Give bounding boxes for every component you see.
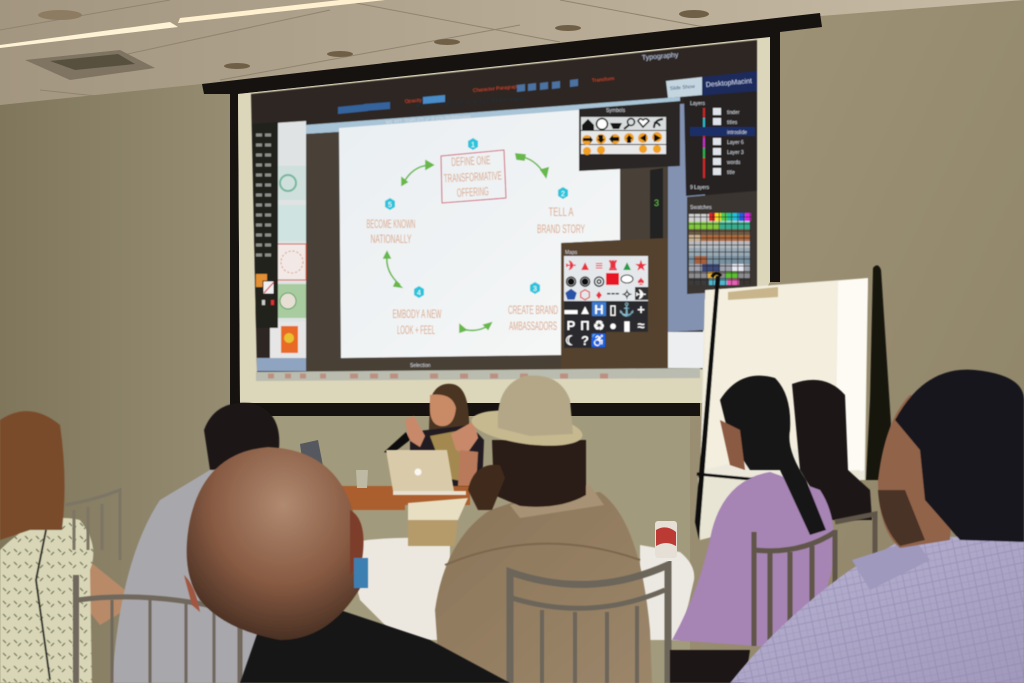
cycle arrows	[384, 154, 548, 332]
application menu labels: DesktopMacint	[706, 78, 752, 89]
maps symbols panel: ⬡	[579, 287, 591, 302]
maps symbols panel: ▬	[564, 302, 578, 317]
front table with orange top	[340, 486, 470, 510]
step 4 label	[392, 286, 442, 337]
man on right in plaid shirt	[730, 370, 1024, 683]
layers panel: words	[727, 160, 741, 166]
left back chair	[65, 490, 120, 560]
application menu labels	[338, 52, 752, 126]
maps symbols panel: ≡	[595, 258, 603, 273]
swatches panel	[687, 191, 757, 294]
layers panel: titles	[727, 120, 738, 126]
maps symbols panel: ◉	[579, 273, 591, 288]
step 1 label	[441, 138, 506, 203]
step 5 label	[366, 198, 416, 246]
application menu labels: WS_PPT_TEMPLATE.ai* @ 91% (RGB/Preview)	[415, 96, 525, 110]
step 2 label: TELL A	[548, 205, 574, 219]
layers panel: Layers	[690, 101, 706, 107]
step 4 label: 4	[417, 290, 421, 297]
step 2 label	[537, 187, 585, 236]
maps symbols panel: ▲	[621, 258, 633, 273]
maps symbols panel	[561, 238, 668, 370]
swatches panel: Swatches	[690, 205, 712, 211]
maps symbols panel: Π	[580, 318, 590, 333]
left front chair	[76, 575, 240, 683]
thermos	[300, 440, 323, 466]
slide thumbnails	[257, 121, 306, 371]
maps symbols panel: ?	[581, 333, 589, 348]
layers panel	[684, 91, 757, 196]
water cup	[356, 470, 368, 488]
projected application window: 3	[654, 198, 659, 208]
maps symbols panel: ✈	[636, 287, 647, 302]
maps symbols panel: ◉	[565, 273, 577, 288]
ceiling	[0, 0, 1024, 110]
step 3 label: CREATE BRAND	[508, 303, 558, 317]
step 1 label: DEFINE ONE	[451, 153, 491, 169]
maps symbols panel: ♿	[591, 333, 607, 348]
chair in front of hat man	[510, 565, 668, 683]
layers panel: title	[727, 170, 735, 176]
man in grey shirt	[112, 403, 290, 683]
maps symbols panel: ♜	[607, 258, 619, 273]
maps symbols panel: Maps	[565, 250, 578, 256]
application menu labels: WS_PPT_TEMPLATE.ai* @ 91% (RGB/Preview)	[386, 114, 471, 126]
projected application window	[251, 40, 757, 381]
step 3 label: AMBASSADORS	[509, 319, 557, 333]
flipchart easel with paper pad	[695, 265, 892, 540]
projector screen housing	[202, 13, 822, 416]
laptop	[386, 450, 466, 495]
step 1 label: 1	[471, 142, 475, 149]
maps symbols panel: +	[637, 302, 645, 317]
layers panel: introslide	[727, 130, 747, 136]
maps symbols panel: ≈	[637, 318, 645, 333]
projector screen	[238, 37, 770, 403]
maps symbols panel: ⬟	[564, 287, 577, 302]
bald man in black shirt	[184, 447, 510, 683]
application menu labels: Slide Show	[670, 84, 695, 92]
artboard slide with process cycle: BECOME KNOWN	[366, 217, 416, 231]
layers panel: 9 Layers	[690, 185, 710, 191]
maps symbols panel: ♦	[596, 287, 603, 302]
tools column	[252, 122, 278, 328]
step 4 label: LOOK + FEEL	[397, 323, 435, 337]
maps symbols panel: P	[567, 318, 576, 333]
man with straw hat and tan shirt	[435, 376, 652, 683]
maps symbols panel: ▲	[579, 302, 591, 317]
step 5 label: 5	[388, 202, 392, 209]
right side chairs	[754, 514, 875, 646]
left woman in patterned dress	[0, 411, 125, 683]
application menu labels: Transform	[592, 76, 615, 84]
maps symbols panel: ◎	[593, 273, 605, 288]
application menu labels: Character Paragraph	[473, 84, 520, 94]
layers panel: Layer 3	[727, 150, 744, 156]
status bar and dock	[256, 360, 700, 381]
soda can	[655, 521, 677, 558]
maps symbols panel: ♻	[593, 318, 605, 333]
status bar and dock: Selection	[410, 363, 431, 369]
maps symbols panel: ▲	[579, 258, 591, 273]
person in teal shirt behind hat	[490, 447, 586, 496]
application menu labels: Typography	[642, 52, 679, 62]
maps symbols panel: ✈	[566, 258, 577, 273]
symbols panel	[579, 101, 680, 171]
maps symbols panel: ♠	[638, 273, 645, 288]
application menu labels: Opacity	[405, 97, 423, 105]
cardboard box	[408, 498, 468, 546]
symbols panel: Symbols	[606, 108, 626, 114]
layers panel: tinder	[727, 110, 740, 116]
layers panel: Layer 6	[727, 140, 744, 146]
step 4 label: EMBODY A NEW	[392, 307, 442, 321]
artboard slide with process cycle	[339, 108, 620, 358]
step 5 label: NATIONALLY	[370, 232, 412, 246]
canvas background	[306, 110, 680, 372]
maps symbols panel: ⚓	[619, 302, 635, 317]
step 1 label: OFFERING	[456, 184, 489, 200]
step 3 label	[508, 282, 558, 333]
presenter at the front table	[384, 384, 484, 490]
maps symbols panel: ▯	[609, 302, 617, 317]
maps symbols panel: H	[594, 302, 604, 317]
step 3 label: 3	[533, 286, 537, 293]
step 2 label: BRAND STORY	[537, 222, 585, 236]
maps symbols panel: ✧	[622, 287, 633, 302]
woman in purple shirt with ponytail	[670, 376, 872, 683]
maps symbols panel: ★	[635, 258, 647, 273]
white tablecloth tables	[345, 538, 694, 640]
maps symbols panel: ●	[609, 318, 617, 333]
maps symbols panel: ☾	[565, 333, 577, 348]
step 2 label: 2	[561, 191, 565, 198]
maps symbols panel: ---	[606, 285, 620, 300]
maps symbols panel: ▮	[623, 318, 631, 333]
step 1 label: TRANSFORMATIVE	[443, 168, 502, 186]
